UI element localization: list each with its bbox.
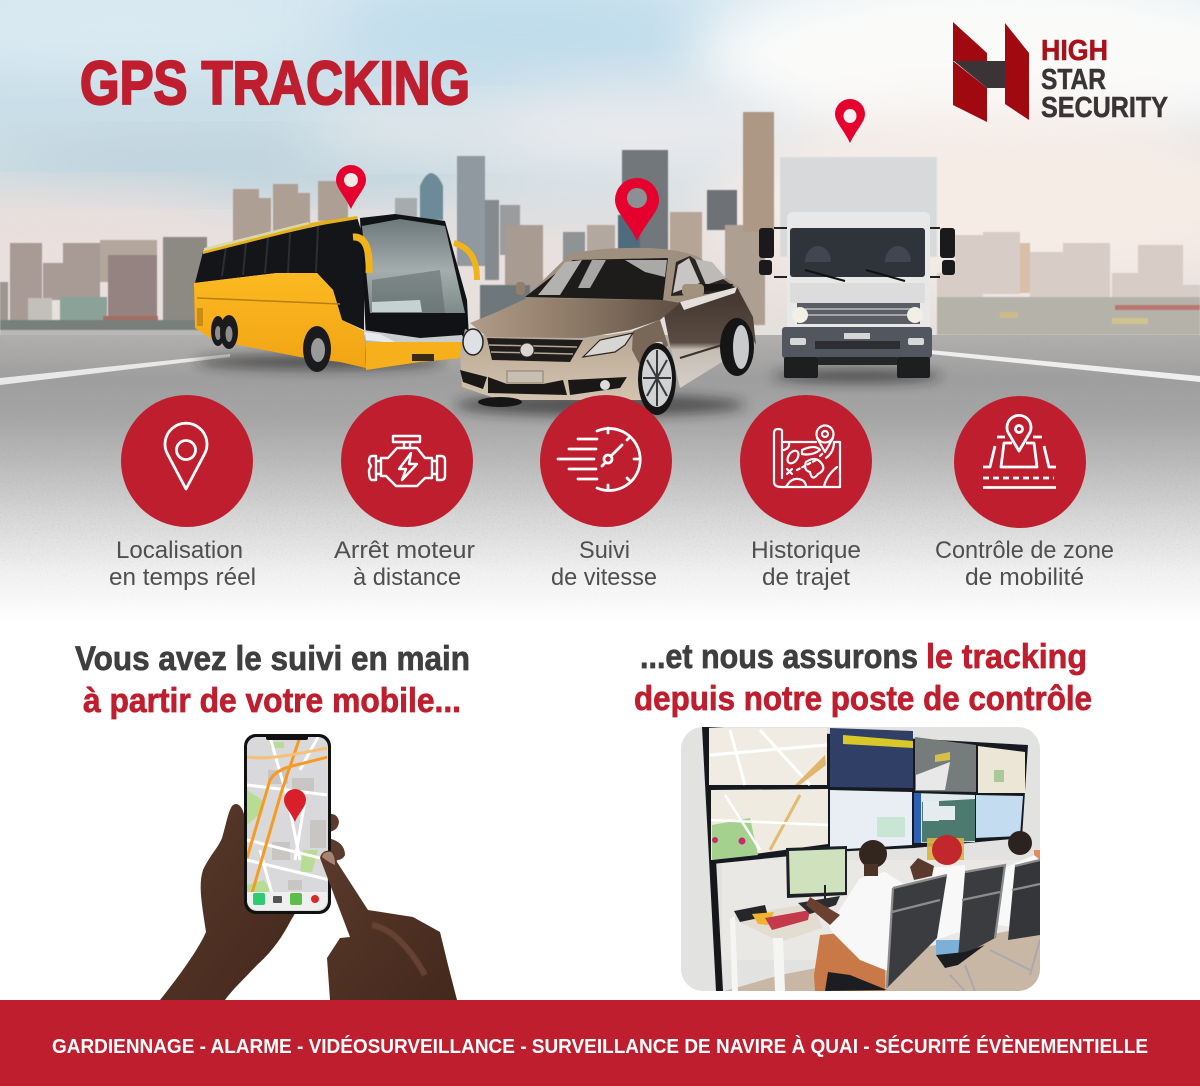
road (0, 335, 1200, 625)
feature 1: real-time location (109, 395, 256, 591)
heading: mobile tracking (75, 640, 470, 720)
label: Localisation (116, 537, 243, 564)
fingers behind phone (328, 814, 345, 860)
desk (729, 896, 840, 991)
brown sedan (460, 248, 756, 415)
label: Historique (751, 537, 861, 564)
yellow coach bus (194, 214, 477, 372)
title: GPS TRACKING (80, 49, 470, 117)
icon: bus location pin (336, 165, 366, 209)
bus window band (195, 217, 364, 330)
bus body (194, 273, 366, 368)
feature 4: trip history (740, 395, 872, 591)
heading: control room tracking: ...et nous assurons (640, 638, 918, 676)
car door side (663, 287, 756, 388)
logo wordmark: STAR (1041, 64, 1106, 96)
box truck (759, 157, 955, 378)
label (751, 537, 861, 591)
feature 5: mobility zone control (935, 396, 1114, 591)
logo wordmark: HIGH (1041, 35, 1108, 67)
car front (460, 320, 668, 400)
icon: truck location pin (835, 99, 865, 143)
label: Arrêt moteur (334, 537, 475, 564)
icon: speedometer (540, 395, 672, 527)
label: de vitesse (551, 564, 657, 591)
illustration: hands holding phone (160, 734, 457, 1000)
car cabin (525, 248, 742, 305)
bus front (360, 214, 469, 338)
car rear wheel (720, 318, 754, 376)
operator 1 (806, 840, 907, 991)
label (109, 537, 256, 591)
operator 2 (910, 835, 966, 956)
heading: control room tracking: le tracking (926, 638, 1087, 676)
label: Contrôle de zone (935, 537, 1114, 564)
feature 2: remote engine stop (334, 395, 475, 591)
bus mirrors (353, 237, 369, 273)
pointing hand (320, 851, 457, 1000)
heading: mobile tracking: Vous avez le suivi en main (75, 640, 470, 678)
logo wordmark: SECURITY (1041, 92, 1168, 124)
heading: control room tracking: depuis notre poste de contrôle (634, 680, 1092, 718)
icon: engine (341, 395, 473, 527)
logo mark (953, 22, 1029, 122)
label (334, 537, 475, 591)
label: de trajet (762, 564, 850, 591)
car front wheel (640, 342, 668, 400)
footer services text: GARDIENNAGE - ALARME - VIDÉOSURVEILLANCE - SURVEILLANCE DE NAVIRE À QUAI - SÉCURITÉ ÉVÈNEMENTIELLE (52, 1035, 1148, 1058)
label (935, 537, 1114, 591)
wall black frame (706, 727, 1028, 864)
bus wheels (211, 316, 225, 346)
label: de mobilité (965, 564, 1084, 591)
icon: map with pin (740, 395, 872, 527)
holding hand (160, 804, 300, 1000)
desk monitor (786, 846, 847, 898)
vehicle shadows (195, 354, 942, 416)
icon: location pin (121, 395, 253, 527)
office chairs (825, 860, 1040, 991)
label: en temps réel (109, 564, 256, 591)
car hood (470, 298, 680, 338)
logo: High Star Security (953, 22, 1168, 124)
icon: phone map pin (284, 789, 306, 822)
operator 3 (998, 831, 1040, 930)
label (551, 537, 657, 591)
heading: mobile tracking: à partir de votre mobile... (83, 682, 461, 720)
heading: control room tracking (634, 638, 1092, 718)
label: Suivi (579, 537, 630, 564)
footer band (0, 1000, 1200, 1086)
background: sky and city (0, 0, 1200, 602)
icon: zone pin on road (954, 396, 1086, 528)
label: à distance (353, 564, 461, 591)
wall monitors (709, 728, 1025, 860)
phone (244, 734, 331, 914)
icon: car location pin (615, 178, 659, 241)
photo: control room (681, 727, 1040, 991)
feature 3: speed tracking (540, 395, 672, 591)
city skyline (0, 112, 1200, 340)
logo wordmark (1041, 35, 1168, 124)
